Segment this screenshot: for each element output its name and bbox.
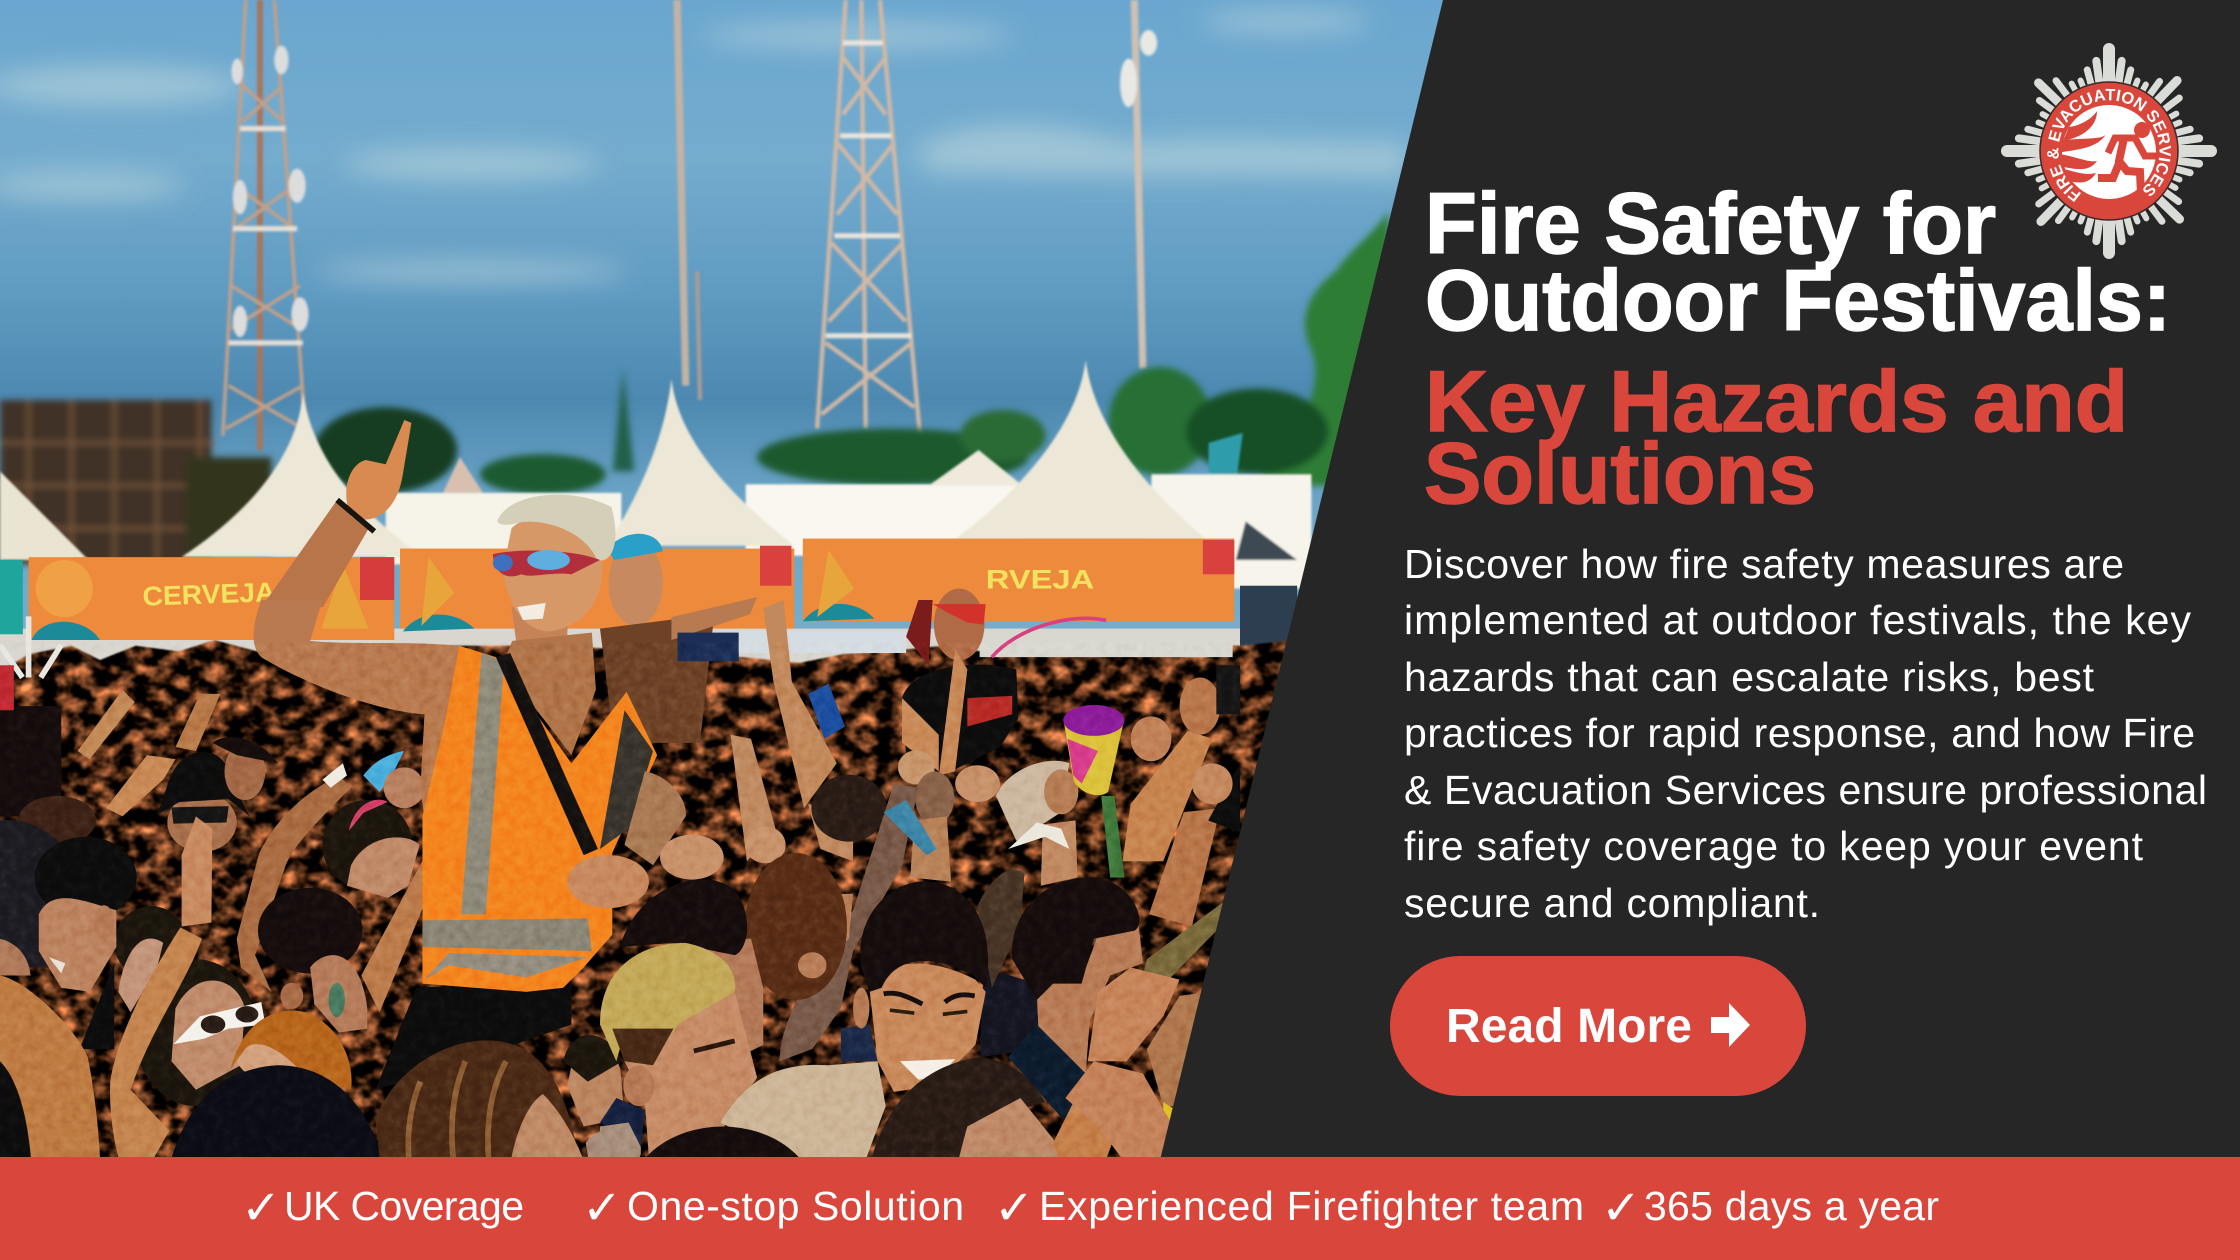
description paragraph: [1404, 541, 2207, 926]
pole right with antenna: [1134, 0, 1143, 369]
footer benefits list: UK Coverage: [284, 1183, 524, 1229]
raised arms at rear: [78, 690, 135, 759]
footer benefits list: Experienced Firefighter team: [1039, 1183, 1584, 1229]
footer benefits list: ✓: [241, 1182, 281, 1235]
logo: Fire & Evacuation Services badge: FIRE & EVACUATION SERVICES: [2047, 88, 2171, 202]
white marquees and tent peaks: [0, 360, 1311, 589]
raised hand: [1088, 967, 1180, 1061]
white stage base below banners: [0, 629, 1286, 686]
footer benefits list: 365 days a year: [1644, 1183, 1939, 1229]
black curly head: [620, 879, 763, 1061]
man with pink sunglasses: [322, 800, 420, 898]
vertical reflective strip: [461, 653, 504, 914]
red ring: [2040, 82, 2178, 220]
chest: [502, 633, 596, 755]
footer benefits list: ✓: [994, 1182, 1034, 1235]
orange CERVEJA banners: RVEJA: [986, 564, 1094, 595]
dark side strip: [600, 710, 653, 849]
smile: [517, 603, 546, 620]
red haired woman: [231, 1010, 352, 1090]
vest: [422, 646, 657, 992]
footer bar: [0, 1157, 2240, 1260]
neck and head: [511, 607, 569, 679]
second woman behind: [114, 906, 188, 1012]
tower left: [223, 0, 309, 450]
crowd right section: [600, 589, 1240, 1260]
foreground raised hands: [1053, 1061, 1176, 1240]
dark clothing between heads: [980, 967, 1039, 1057]
smiling man: [853, 881, 988, 1092]
treeline: [314, 211, 1389, 494]
background photo: festival crowd: [0, 0, 1471, 1260]
flames: [2057, 111, 2107, 183]
title: white lines: Outdoor Festivals:: [1425, 253, 2171, 349]
button: Read More: Read More: [1446, 1000, 1692, 1053]
communication towers and poles: [223, 0, 1157, 450]
wooden stick: [1133, 898, 1229, 1016]
head behind: [808, 775, 887, 861]
hand on strap: [567, 855, 649, 908]
long haired man: [376, 1040, 594, 1240]
woman with white sunglasses: [110, 927, 265, 1192]
subtitle: red lines: [1424, 354, 2128, 522]
footer benefits list: ✓: [1601, 1182, 1641, 1235]
title: white lines: Fire Safety for: [1425, 176, 1996, 272]
yellow trimmed vest wearer: [584, 1129, 640, 1240]
horizontal reflective strips: [422, 918, 592, 951]
trousers: [376, 980, 571, 1090]
white inner disc: [2062, 105, 2156, 199]
blue cap: [363, 751, 404, 792]
footer benefits list: One-stop Solution: [627, 1183, 964, 1229]
stage posts: [0, 616, 61, 678]
mesh sleeve arm: [978, 870, 1024, 988]
pale hat: [996, 761, 1069, 841]
tower centre: [817, 0, 920, 436]
description paragraph: fire safety coverage to keep your event: [1404, 823, 2144, 869]
lanyard: [496, 653, 598, 855]
description paragraph: secure and compliant.: [1404, 880, 1820, 926]
subtitle: red lines: Solutions: [1424, 426, 1816, 522]
hand with pointing finger: [346, 420, 411, 520]
open hands: [660, 835, 724, 880]
pink hoop: [992, 618, 1106, 657]
grey sleeved arm: [780, 784, 918, 1061]
logo: Fire & Evacuation Services badge: [2001, 43, 2217, 259]
woman with red hair: [902, 589, 1018, 776]
boy with face paint: [258, 888, 367, 1033]
icon: arrow: [1711, 1003, 1750, 1047]
orange CERVEJA banners: [0, 539, 1234, 640]
dark figures far left: [0, 706, 61, 816]
blue can: [808, 684, 845, 739]
head at rear right of hat: [224, 743, 265, 800]
curly haired head: [745, 853, 853, 1000]
blonde fur hair: [720, 1061, 886, 1240]
man at left: [35, 837, 137, 1049]
shoulder and head near vest: [567, 1044, 624, 1127]
arm right edge: [1147, 992, 1208, 1106]
fists: [898, 750, 935, 784]
bleached hair: [497, 495, 615, 561]
badge lettering: [2058, 100, 2160, 194]
description paragraph: Discover how fire safety measures are: [1404, 541, 2124, 587]
running figure: [2098, 122, 2156, 195]
footer benefits list: [241, 1182, 1939, 1235]
colourful cup: [1063, 705, 1124, 878]
wristband: [337, 500, 374, 531]
title: white lines: [1425, 176, 2171, 349]
man with closed eyes: [864, 1057, 1086, 1249]
dark shirt right: [1090, 1159, 1147, 1240]
banner lettering: CERVEJA: [142, 576, 276, 612]
crowd texture: [0, 640, 1293, 1164]
description paragraph: & Evacuation Services ensure professional: [1404, 767, 2207, 813]
description paragraph: implemented at outdoor festivals, the key: [1404, 597, 2192, 643]
woman with blue visor: [600, 534, 757, 743]
main figure: man in orange hi-vis vest: [253, 420, 657, 992]
sky: [0, 0, 1471, 800]
black hood: [161, 1065, 396, 1240]
man with fade haircut: [1008, 877, 1143, 1127]
button: Read More: [1390, 956, 1806, 1096]
stage edge: [678, 633, 739, 661]
silver star rays: [2007, 49, 2211, 253]
film grain over crowd: [0, 643, 1293, 1164]
foreground left arm: [0, 1033, 31, 1212]
blue vest shoulder: [600, 1098, 649, 1240]
description paragraph: practices for rapid response, and how Fire: [1404, 710, 2195, 756]
dark content panel: [1160, 0, 2240, 1160]
dark head foreground: [629, 1127, 816, 1260]
shoulder: [624, 771, 686, 865]
crowd left section: [0, 616, 640, 1240]
description paragraph: hazards that can escalate risks, best: [1404, 654, 2095, 700]
wrist with white band: [1008, 769, 1078, 886]
sunglasses: [493, 551, 600, 576]
upper arm and torso: [253, 600, 459, 853]
subtitle: red lines: Key Hazards and: [1425, 354, 2128, 450]
pole centre-left: [677, 0, 686, 386]
blond man: [600, 943, 757, 1159]
arm beside vest: [361, 853, 429, 1012]
raised hand and arm of woman: [182, 816, 212, 927]
arms reaching up: [763, 600, 837, 808]
hat wearer: [157, 752, 250, 852]
footer benefits list: ✓: [582, 1182, 622, 1235]
far right arms: [1122, 731, 1212, 861]
scaffolding: [0, 400, 271, 564]
arm with wristband: [237, 776, 351, 992]
raised forearm: [261, 500, 369, 607]
